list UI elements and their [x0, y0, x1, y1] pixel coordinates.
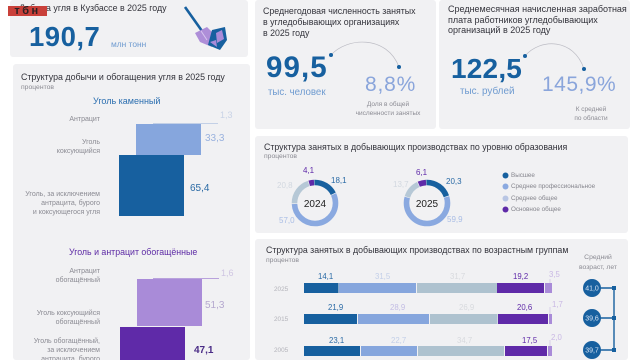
label: enriched anthracite	[56, 268, 100, 284]
caption: average age: Средний	[584, 254, 612, 261]
number: 8,8%: 8,8%	[365, 73, 416, 96]
heading: employment: в угледобывающих организациях	[263, 17, 399, 27]
chart: donut 2025	[404, 180, 450, 226]
caption: regional comparison	[574, 106, 608, 122]
panel: employment	[255, 0, 436, 129]
value: 65,4: 65,4	[190, 183, 209, 194]
chart: average age markers: 41,0	[585, 286, 599, 292]
row 2005: 22,7	[391, 336, 406, 345]
value: 57,0: 57,0	[279, 216, 295, 225]
number: 145,9%: 145,9%	[542, 73, 616, 96]
row 2015	[274, 300, 563, 324]
value: 33,3: 33,3	[205, 133, 224, 144]
label: coking coal	[57, 138, 100, 154]
subheading: percent: процентов	[266, 257, 299, 264]
heading: structure: Структура добычи и обогащения угля в 2025 году	[21, 72, 225, 82]
unit: thousand roubles: тыс. рублей	[460, 86, 514, 97]
row 2025	[274, 270, 561, 293]
row 2025: 2025	[274, 286, 289, 293]
chart: donut 2024: 2024	[304, 199, 327, 210]
bar: other enriched coal	[120, 327, 185, 360]
panel: salary	[439, 0, 630, 129]
value: 51,3: 51,3	[205, 300, 224, 311]
row 2025: 31,5	[375, 272, 391, 281]
value: 1,6: 1,6	[221, 268, 234, 278]
chart: donut 2025: 2025	[416, 199, 439, 210]
chart: average age markers	[583, 279, 616, 359]
chart: average age markers: 39,6	[585, 316, 599, 322]
legend item: higher: Высшее	[511, 172, 535, 179]
label: other coal: Уголь, за исключением	[25, 190, 100, 198]
value: 20,8: 20,8	[277, 181, 293, 190]
number: 190,7: 190,7	[29, 21, 100, 52]
bar: enriched coking coal	[137, 279, 202, 326]
subheading: percent: процентов	[21, 84, 54, 91]
heading: coal output: Добыча угля в Кузбассе в 2025 году	[19, 3, 167, 13]
label: other enriched coal: Уголь обогащённый,	[34, 338, 100, 344]
number: 99,5: 99,5	[266, 51, 328, 84]
caption: share: численности занятых	[356, 110, 420, 117]
heading: employment	[263, 6, 416, 38]
value: 4,1: 4,1	[303, 166, 314, 175]
label: enriched anthracite: обогащённый	[56, 276, 100, 284]
legend item: secondary: Среднее общее	[511, 195, 558, 202]
value: 13,7: 13,7	[393, 180, 409, 189]
heading: employment: Среднегодовая численность занятых	[263, 6, 416, 16]
label: enriched coking coal	[37, 310, 100, 326]
caption: share: Доля в общей	[367, 101, 409, 108]
caption: regional comparison: К средней	[576, 106, 606, 113]
label: coking coal: коксующийся	[57, 148, 100, 154]
row 2005: 17,5	[522, 336, 538, 345]
row 2015: 26,9	[459, 303, 474, 312]
label: anthracite: Антрацит	[69, 116, 100, 122]
label: other coal: антрацита, бурого	[41, 200, 100, 206]
legend	[502, 172, 595, 213]
heading: age: Структура занятых в добывающих производствах по возрастным группам	[266, 244, 568, 254]
label: other enriched coal: за исключением	[47, 346, 100, 354]
heading: hard coal: Уголь каменный	[93, 96, 160, 106]
chart: donut 2024	[292, 180, 338, 226]
caption: average age	[579, 254, 617, 271]
bar: anthracite	[153, 123, 218, 124]
row 2015: 2015	[274, 316, 289, 323]
number: 122,5: 122,5	[451, 53, 522, 84]
heading: education: Структура занятых в добывающих производствах по уровню образования	[264, 142, 567, 152]
row 2015: 28,9	[390, 303, 405, 312]
row 2025: 19,2	[513, 272, 528, 281]
legend item: basic: Основное общее	[511, 206, 561, 213]
caption: share	[356, 101, 420, 117]
unit: million tonnes: млн тонн	[111, 39, 146, 49]
panel: coal production structure	[13, 64, 250, 360]
heading: salary: организаций в 2025 году	[448, 25, 550, 35]
value: 20,3: 20,3	[446, 177, 462, 186]
bar: other coal	[119, 155, 184, 216]
subheading: percent: процентов	[264, 152, 297, 160]
row 2005: 2,0	[551, 333, 563, 342]
arc connector	[329, 42, 401, 69]
panel: coal output	[10, 0, 248, 57]
row 2015: 21,9	[328, 303, 343, 312]
logo: channel mark	[8, 6, 47, 16]
row 2005	[274, 333, 563, 356]
row 2015: 1,7	[552, 300, 563, 309]
heading: salary	[448, 4, 627, 35]
heading: enriched coal: Уголь и антрацит обогащённые	[69, 247, 197, 257]
label: other enriched coal	[34, 337, 100, 360]
heading: employment: в 2025 году	[263, 28, 309, 38]
caption: average age: возраст, лет	[579, 264, 617, 271]
label: enriched coking coal: обогащённый	[56, 318, 100, 326]
legend item: vocational: Среднее профессиональное	[511, 183, 595, 190]
label: enriched coking coal: Уголь коксующийся	[37, 310, 100, 316]
heading: salary: Среднемесячная начисленная заработная	[448, 4, 627, 14]
panel: education structure	[255, 136, 628, 233]
row 2005: 2005	[274, 347, 289, 354]
chart: average age markers: 39,7	[585, 348, 599, 354]
unit: thousand people: тыс. человек	[268, 87, 326, 98]
label: other coal	[25, 190, 100, 216]
bar: enriched anthracite	[153, 278, 219, 279]
panel: age structure	[255, 239, 628, 360]
row 2005: 23,1	[329, 336, 344, 345]
chart: age bars	[274, 270, 563, 356]
value: 47,1: 47,1	[194, 345, 213, 356]
row 2025: 14,1	[318, 272, 333, 281]
row 2025: 3,5	[549, 270, 561, 279]
heading: salary: плата работников угледобывающих	[448, 15, 598, 25]
row 2025: 31,7	[450, 272, 465, 281]
value: 1,3: 1,3	[220, 110, 233, 120]
caption: regional comparison: по области	[574, 115, 608, 122]
bar: coking coal	[136, 124, 201, 155]
row 2015: 20,6	[517, 303, 532, 312]
value: 59,9: 59,9	[447, 215, 463, 224]
value: 6,1: 6,1	[416, 168, 427, 177]
icon: shovel with coal	[184, 6, 227, 50]
value: 18,1: 18,1	[331, 176, 347, 185]
label: coking coal: Уголь	[82, 138, 100, 146]
arc connector	[523, 43, 586, 71]
label: other coal: и коксующегося угля	[33, 208, 100, 216]
row 2005: 34,7	[457, 336, 472, 345]
label: enriched anthracite: Антрацит	[69, 268, 100, 274]
